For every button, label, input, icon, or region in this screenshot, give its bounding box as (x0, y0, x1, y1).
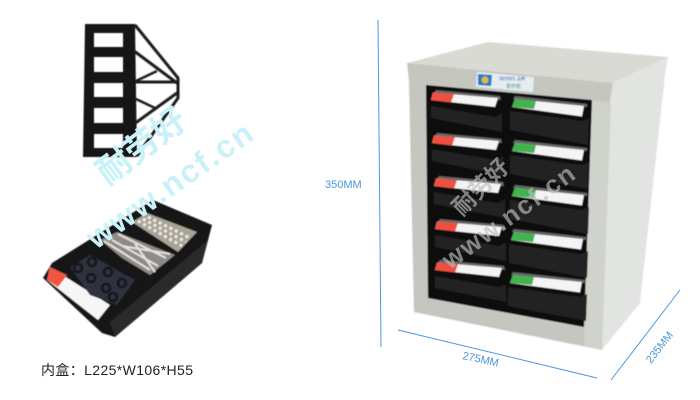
left drawers (427, 90, 506, 302)
watermark: left: www.ncf.cn (79, 113, 261, 256)
cabinet top (407, 42, 668, 83)
drawer bay (426, 85, 592, 327)
cabinet right side (602, 57, 668, 350)
brand plate (476, 72, 534, 92)
right drawers (503, 96, 589, 321)
width label: 275MM (461, 350, 500, 370)
brand plate: 零件柜 (506, 83, 521, 90)
dimension lines (378, 20, 680, 380)
bin divider panel icon (83, 24, 178, 157)
tray label (47, 267, 110, 320)
watermark: left: 耐劳好 (90, 101, 194, 192)
metal nuts (132, 213, 197, 252)
watermark: cabinet: www.ncf.cn (435, 157, 582, 275)
cabinet front frame (407, 63, 613, 350)
inner box dimensions caption: 内盒：L225*W106*H55 (41, 362, 193, 378)
watermark: cabinet: 耐劳好 (447, 153, 514, 221)
metal rods (100, 232, 175, 275)
tray body (43, 200, 212, 337)
depth label: 235MM (644, 330, 676, 366)
cabinet (407, 42, 668, 350)
parts tray with hardware (43, 200, 212, 337)
dark rubber spacers (70, 255, 135, 305)
brand plate: 【耐劳好】品牌 (497, 75, 525, 81)
height label: 350MM (325, 179, 362, 191)
